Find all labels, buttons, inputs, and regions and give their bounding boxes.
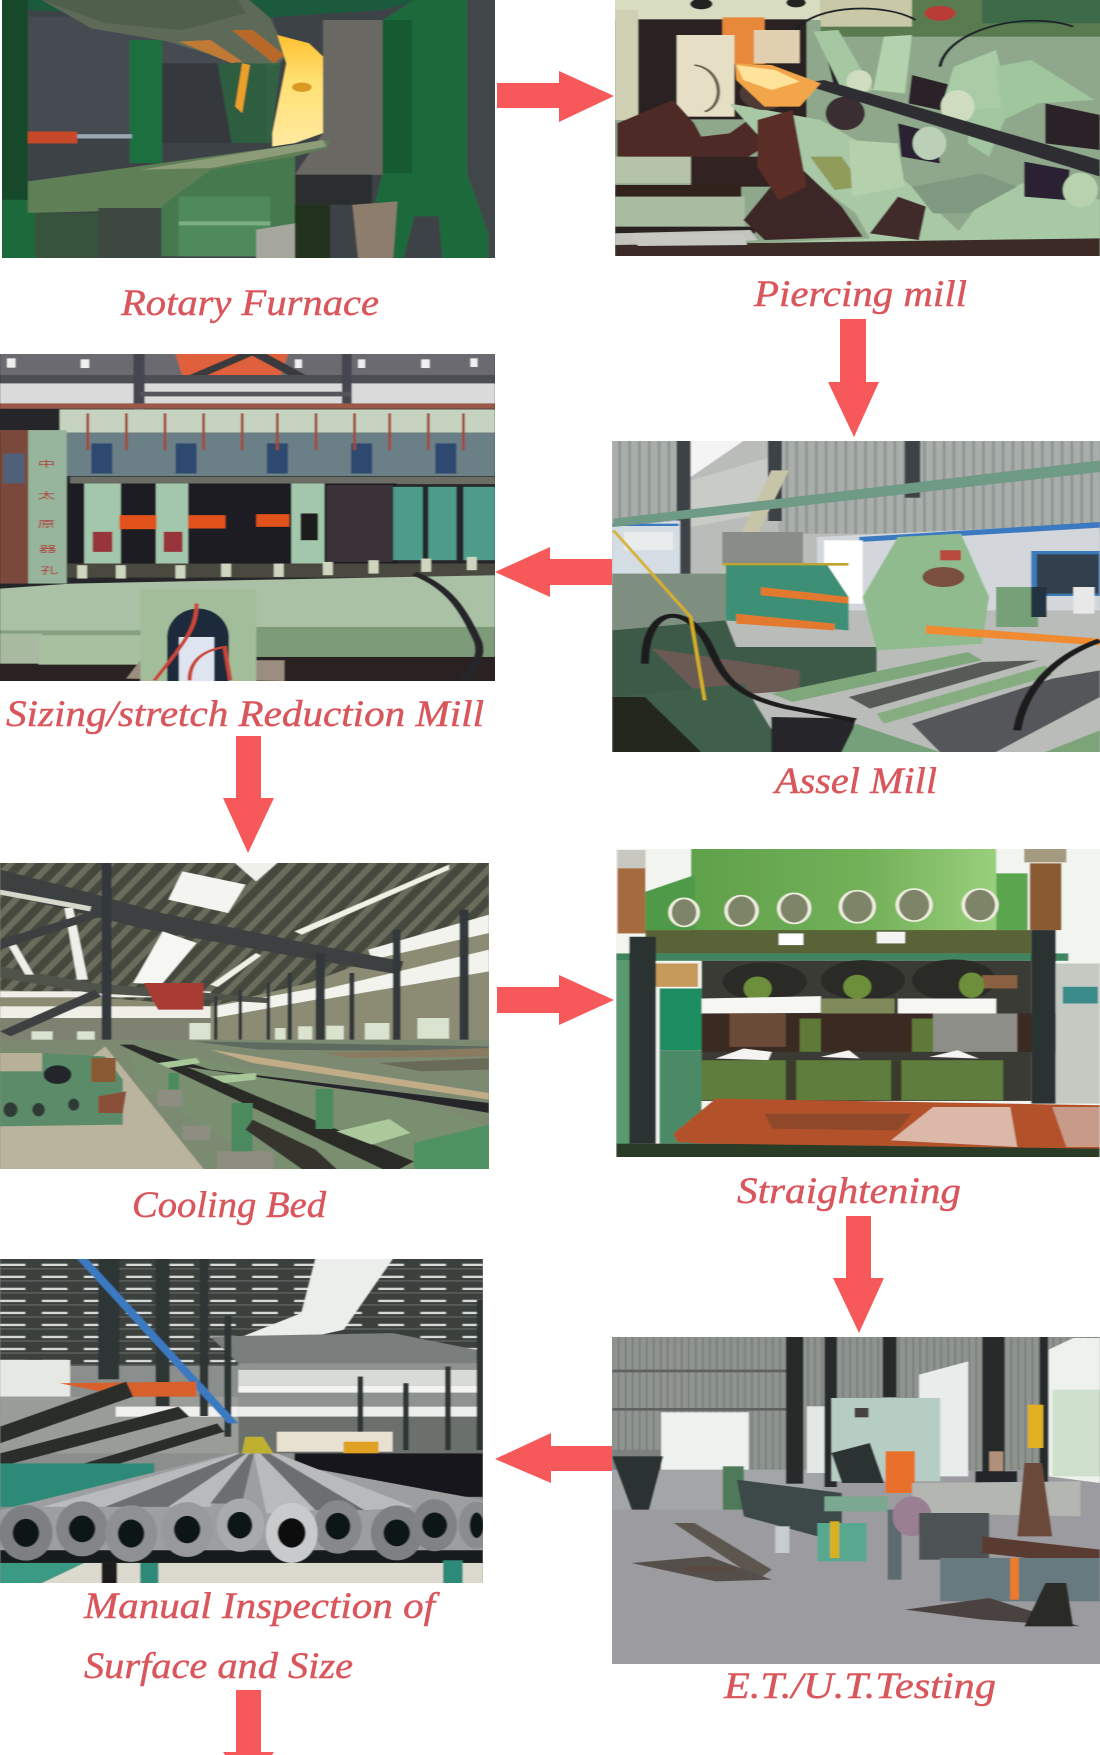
caption: E.T./U.T. testing: E.T./U.T.Testing	[723, 1666, 996, 1707]
caption: straightening: Straightening	[737, 1171, 961, 1212]
arrow: furnace to piercing mill	[497, 71, 614, 122]
sign: red characters on pillar: 孔	[40, 566, 58, 576]
sign: red characters on pillar: 器	[39, 545, 57, 554]
caption: manual inspection, two lines: Surface and Size	[84, 1646, 353, 1687]
photo: assel mill	[612, 441, 1100, 752]
caption: piercing mill: Piercing mill	[753, 274, 967, 315]
photo: rotary furnace	[2, 0, 495, 258]
arrow: manual inspection to next step	[223, 1690, 274, 1755]
sign: red characters on pillar: 中	[37, 459, 55, 469]
sign: red characters on pillar: 原	[37, 520, 55, 529]
caption: assel mill: Assel Mill	[772, 761, 937, 802]
caption: manual inspection, two lines	[83, 1586, 440, 1687]
caption: cooling bed: Cooling Bed	[132, 1185, 327, 1226]
photo: sizing / stretch reduction mill	[0, 354, 495, 681]
caption: manual inspection, two lines: Manual Inspection of	[83, 1586, 440, 1627]
arrow: assel mill to sizing mill	[495, 547, 612, 597]
arrow: sizing mill to cooling bed	[223, 736, 274, 853]
photo: straightening	[616, 849, 1100, 1157]
arrow: straightening to testing	[833, 1216, 884, 1333]
arrow: cooling bed to straightening	[497, 975, 614, 1025]
photo: piercing mill	[615, 0, 1100, 256]
arrow: testing to manual inspection	[495, 1433, 612, 1483]
pipe ends	[0, 1498, 495, 1563]
caption: rotary furnace: Rotary Furnace	[120, 283, 379, 324]
arrow: piercing mill to assel mill	[828, 319, 879, 437]
photo: manual inspection pipes	[0, 1259, 483, 1583]
sign: red characters on pillar	[37, 459, 58, 576]
caption: sizing / stretch reduction mill: Sizing/stretch Reduction Mill	[6, 694, 484, 735]
photo: E.T./U.T. testing	[612, 1337, 1100, 1664]
sign: red characters on pillar: 太	[37, 491, 55, 501]
photo: cooling bed	[0, 863, 489, 1169]
